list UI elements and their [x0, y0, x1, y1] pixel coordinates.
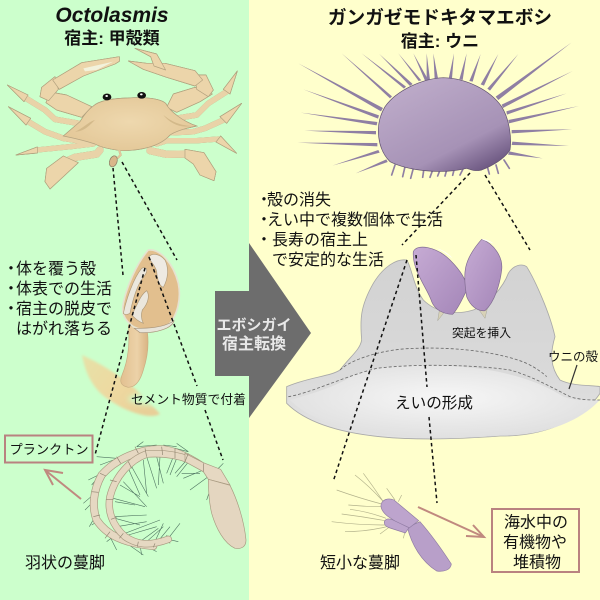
label: short cirri: 短小な蔓脚 — [320, 554, 400, 572]
dashed lines: urchin to barnacle — [402, 173, 530, 250]
subtitle: crustacean host: 宿主: 甲殻類 — [64, 28, 160, 48]
subtitle: sea urchin host: 宿主: ウニ — [401, 31, 479, 51]
icon: sea urchin host — [297, 42, 579, 178]
right traits list: ・ — [256, 212, 272, 229]
left traits list: 体を覆う殻 — [16, 260, 96, 278]
icon: feathery cirrus — [83, 442, 246, 555]
label: gall formation: えいの形成 — [395, 394, 473, 412]
label: feathery cirri: 羽状の蔓脚 — [25, 554, 105, 572]
icon: short cirrus — [332, 473, 451, 571]
dashed shell outlines — [288, 348, 600, 400]
left traits list: 宿主の脱皮で — [16, 300, 112, 318]
dashed lines: barnacle to cirrus — [95, 257, 223, 460]
arrow: host shift — [215, 243, 311, 418]
icon: Octolasmis barnacle — [121, 250, 179, 387]
right traits list: ・ — [256, 192, 272, 209]
right traits list: 長寿の宿主上 — [272, 231, 368, 249]
dashed lines: barnacle to short cirrus — [333, 255, 437, 503]
arrow: toward organic matter — [418, 507, 484, 537]
callout: organic matter — [492, 509, 579, 572]
callout: organic matter: 堆積物 — [513, 554, 561, 572]
title: species name: ガンガゼモドキタマエボシ — [328, 7, 552, 28]
label: urchin shell — [548, 350, 599, 389]
arrow: host shift: エボシガイ — [216, 317, 292, 334]
callout: organic matter: 海水中の — [504, 514, 568, 532]
left traits list: ・ — [3, 281, 19, 298]
label: inserted projections: 突起を挿入 — [452, 326, 511, 340]
label: urchin shell: ウニの殻 — [548, 350, 599, 364]
left traits list: はがれ落ちる — [16, 320, 112, 338]
right traits list: で安定的な生活 — [272, 251, 384, 269]
host carapace fragment — [82, 355, 160, 416]
icon: crab host — [7, 48, 242, 189]
right traits list: ・ — [256, 232, 272, 249]
label background — [128, 391, 252, 407]
gall inner cavity — [290, 365, 600, 438]
panel: Octolasmis background — [0, 0, 249, 600]
callout: organic matter: 有機物や — [503, 534, 567, 552]
right traits list: えい中で複数個体で生活 — [267, 211, 443, 229]
icon: attached purple barnacles — [413, 239, 502, 321]
arrow: host shift: 宿主転換 — [222, 334, 286, 353]
right traits list: 殻の消失 — [267, 191, 331, 209]
left traits list: ・ — [3, 301, 19, 318]
panel: host shift background — [249, 0, 600, 600]
callout: plankton: プランクトン — [10, 442, 89, 457]
title: Octolasmis: Octolasmis — [55, 4, 169, 27]
left traits list: 体表での生活 — [16, 280, 112, 298]
callout: plankton — [5, 436, 92, 462]
arrow: toward plankton — [45, 470, 81, 499]
left traits list: ・ — [3, 261, 19, 278]
dashed lines: crab to barnacle — [113, 162, 177, 275]
label: cement attachment: セメント物質で付着 — [131, 392, 246, 407]
panel: urchin shell gall section — [287, 260, 600, 439]
